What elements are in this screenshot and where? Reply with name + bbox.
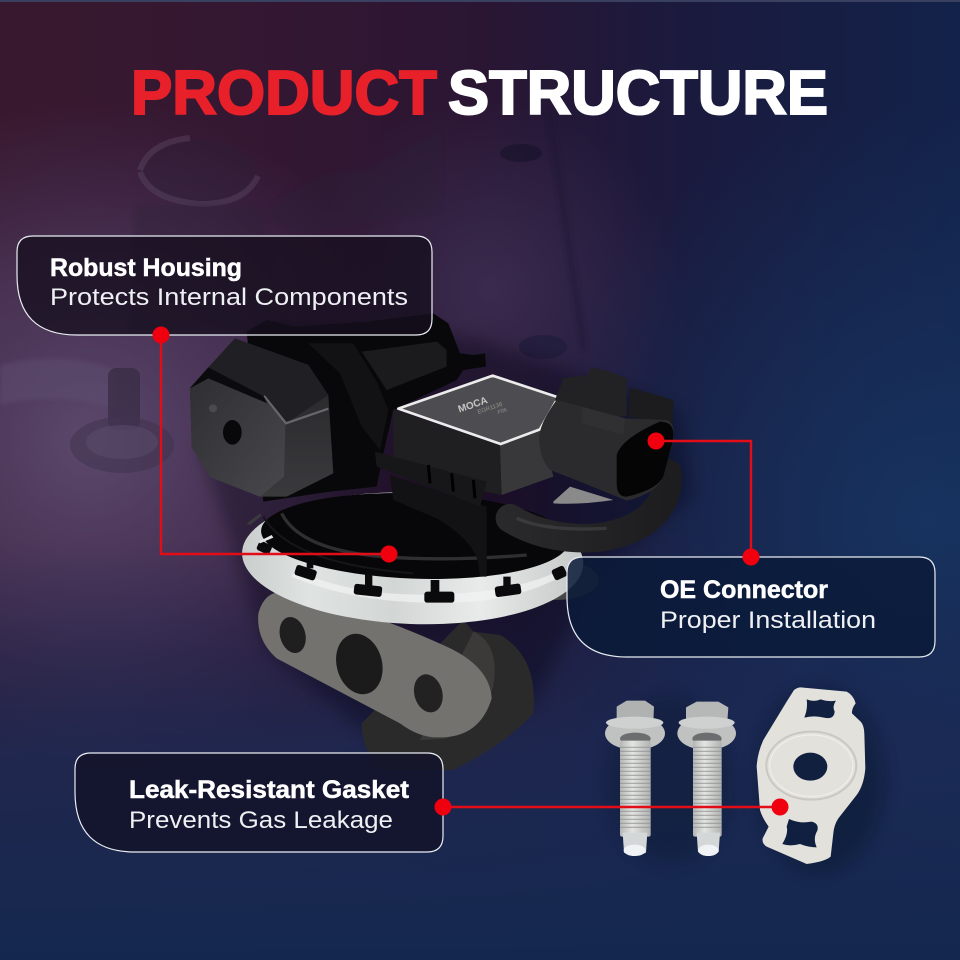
octagon front face xyxy=(190,367,285,497)
module block side xyxy=(393,409,502,495)
callout: Leak-Resistant Gasket: Prevents Gas Leakage xyxy=(129,807,393,834)
bolt 2 xyxy=(677,702,736,856)
leader line: gasket xyxy=(434,798,788,816)
leader line: housing xyxy=(152,326,398,562)
callout: Leak-Resistant Gasket xyxy=(75,753,443,852)
callout: Robust Housing xyxy=(17,236,432,335)
product: EGR valve xyxy=(190,313,693,770)
ring inner disc xyxy=(260,488,570,584)
callout: Robust Housing: Protects Internal Components xyxy=(50,284,408,311)
bracket xyxy=(390,475,487,577)
bolt 1 xyxy=(605,701,665,856)
electrical connector xyxy=(539,367,674,501)
callout: OE Connector: Proper Installation xyxy=(660,607,876,634)
solenoid rear housing xyxy=(247,313,486,502)
flange ring xyxy=(515,560,598,600)
ring tabs xyxy=(247,513,568,603)
callout: OE Connector: OE Connector xyxy=(660,576,828,604)
module logo text: MOCA xyxy=(457,395,489,416)
engine part: hose and grommet xyxy=(0,359,174,473)
title xyxy=(131,59,828,128)
title word: STRUCTURE: STRUCTURE xyxy=(448,59,828,128)
callout: Leak-Resistant Gasket: Leak-Resistant Gasket xyxy=(129,776,410,804)
callout: Robust Housing: Robust Housing xyxy=(50,254,242,282)
engine part: reservoir cap xyxy=(130,130,440,330)
leader line: connector xyxy=(648,432,760,566)
callout: OE Connector xyxy=(567,557,935,657)
rear body block xyxy=(362,620,534,770)
hose loop xyxy=(510,473,667,538)
octagon housing top and side xyxy=(190,338,333,497)
gasket plate xyxy=(757,687,865,864)
mounting plate xyxy=(258,591,492,737)
title word: PRODUCT: PRODUCT xyxy=(131,59,437,128)
product: EGR valve: EGR1136 xyxy=(477,402,504,416)
module top sticker xyxy=(398,376,558,444)
product: EGR valve: F06 xyxy=(497,407,508,416)
clamp band xyxy=(308,343,388,450)
engine part: firewall holes and seam xyxy=(500,144,542,162)
hardware: bolts and gasket xyxy=(605,687,883,873)
